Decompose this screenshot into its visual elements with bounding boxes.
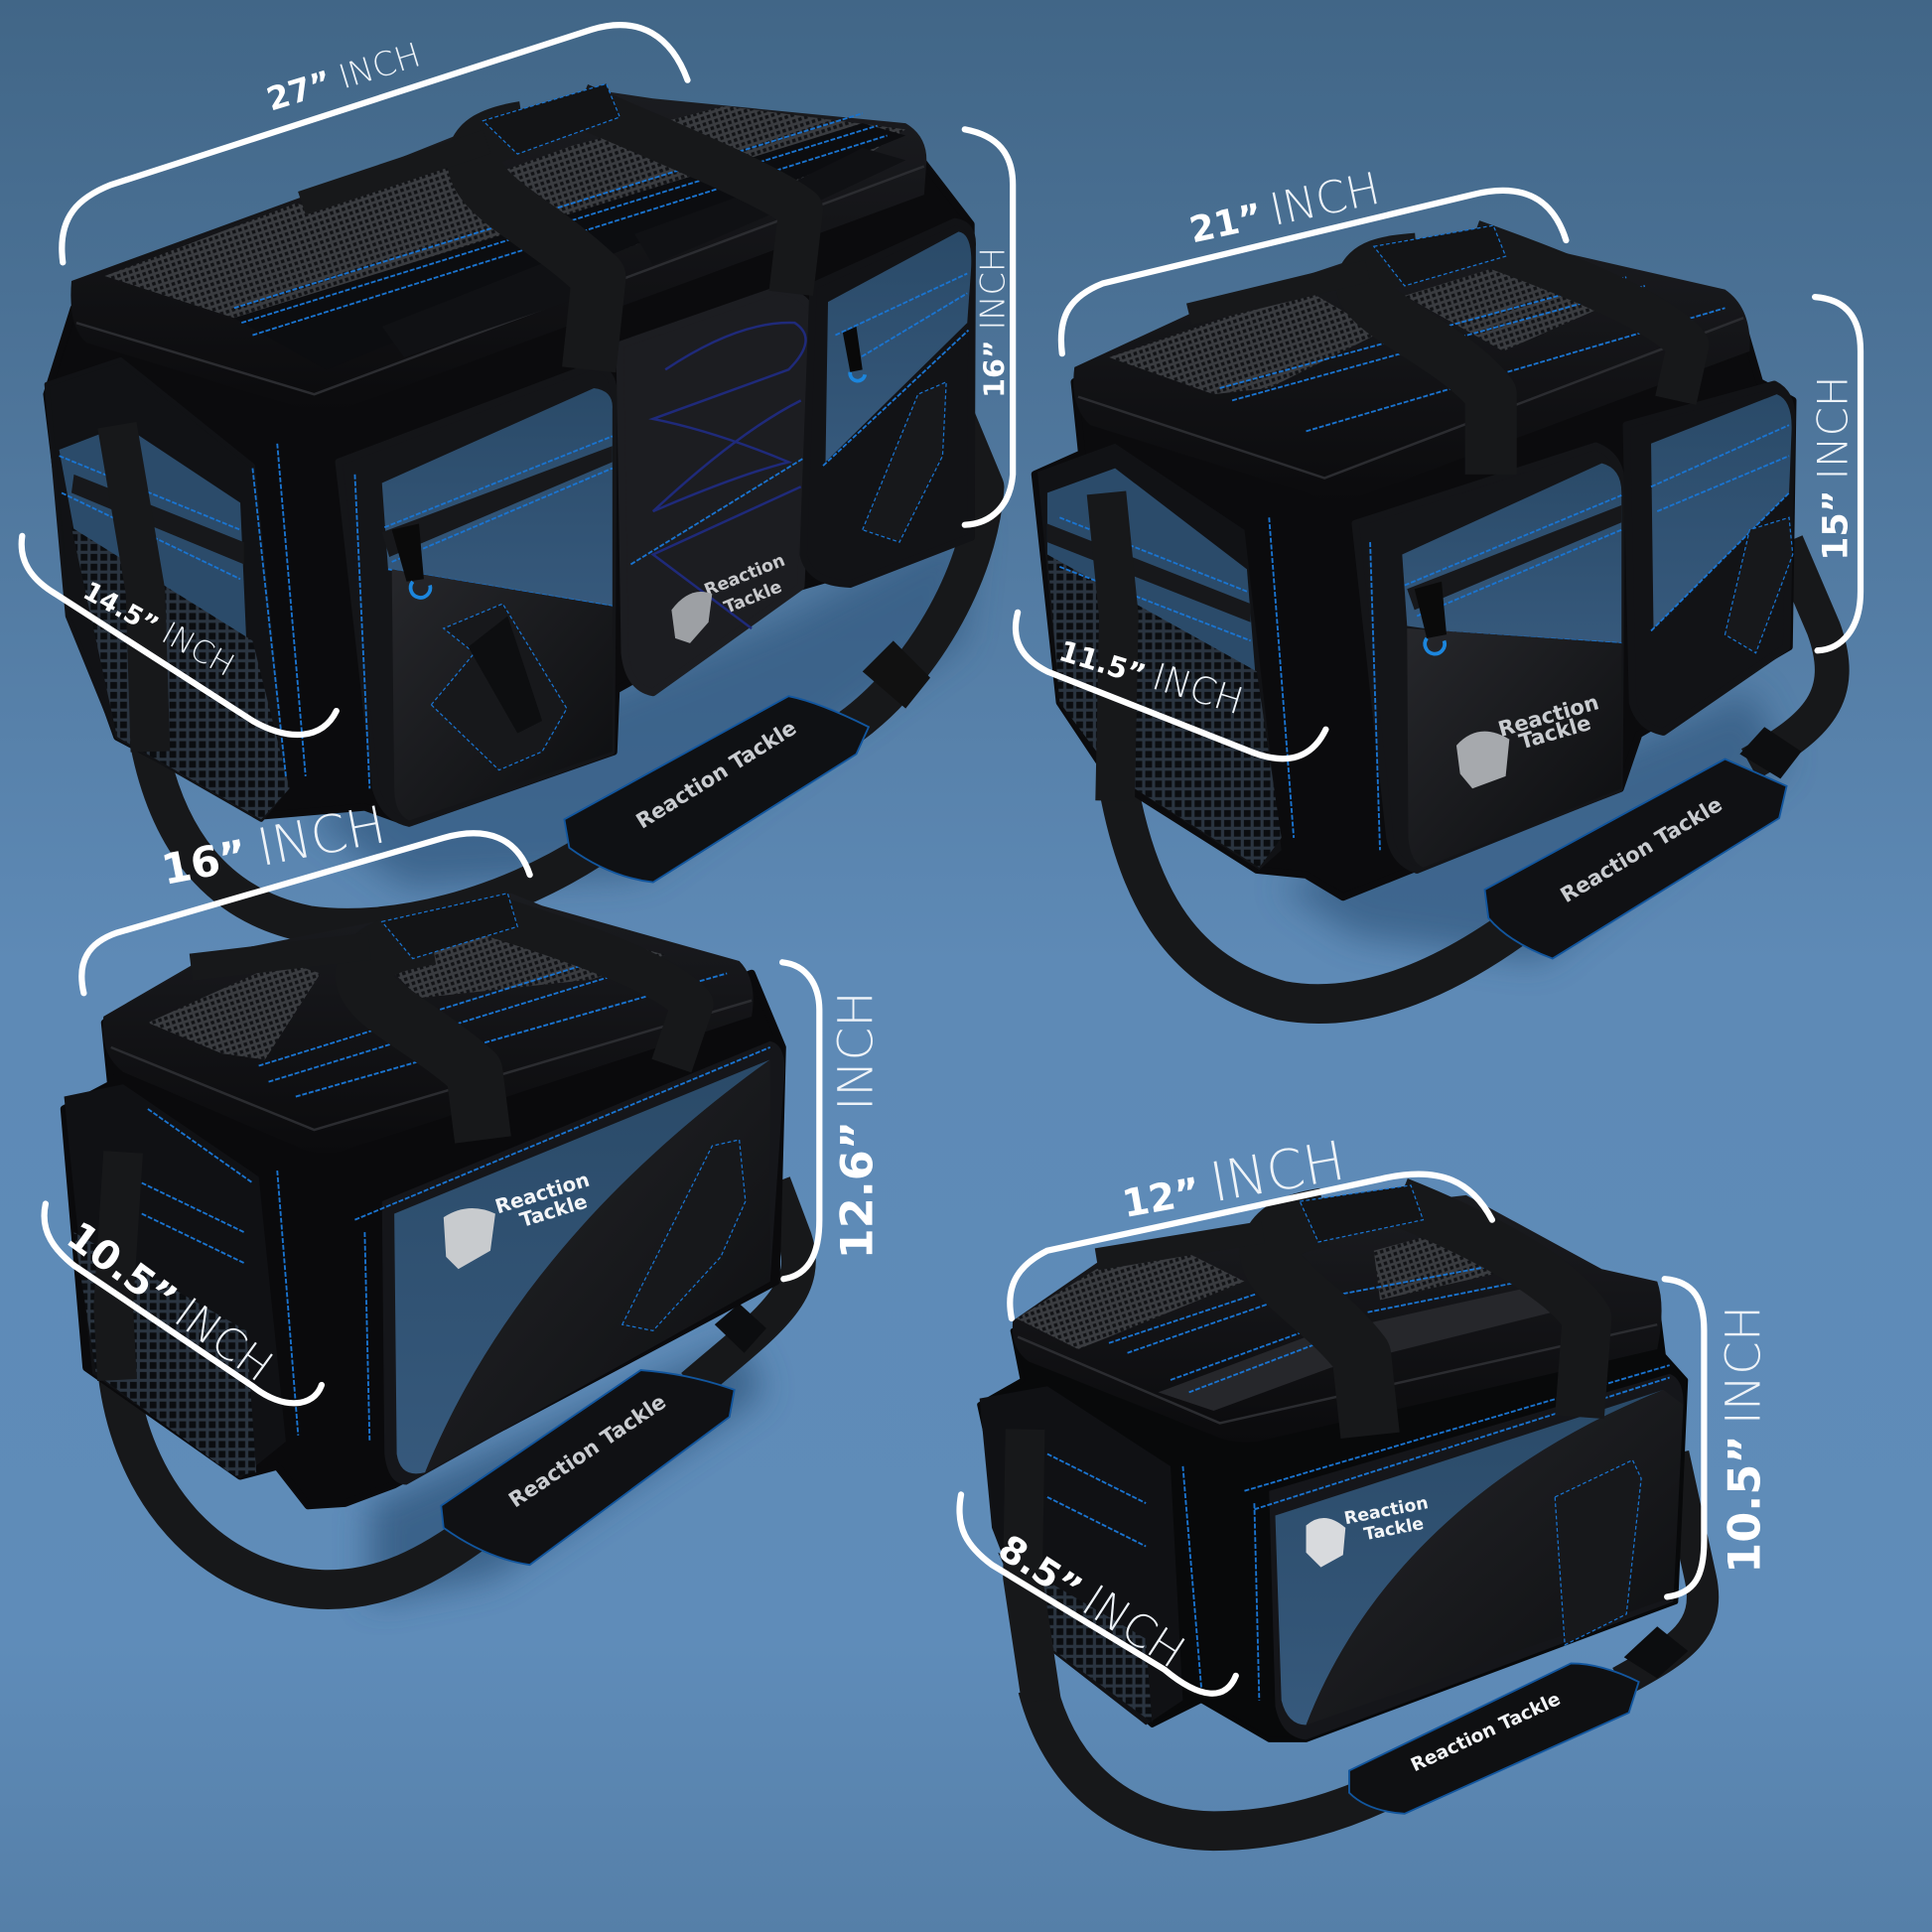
holster [622,1140,746,1330]
dimension: 8.5 inch, bag 4 width [959,1494,1236,1694]
front pocket: Reaction [1495,689,1601,742]
shoulder strap, rear part: Reaction Tackle [631,715,800,833]
front pocket [1355,446,1621,870]
dimension: 11.5 inch, bag 2 width [1016,613,1325,759]
bag body [47,160,971,823]
lid stitching and black stripes [234,123,905,369]
dimension: 10.5 inch, bag 4 height: 10.5”INCH [1716,1306,1771,1574]
end pocket [1037,444,1282,870]
bag 1: large tackle bag [47,83,986,927]
shoulder strap, rear part: Reaction Tackle [1556,791,1726,907]
front pocket center with cords: Tackle [722,577,785,619]
dimension: 12 inch, bag 4 length [1010,1128,1492,1318]
lid gloss [1159,1288,1553,1411]
shoulder strap, front part [113,1152,123,1380]
dimension: 12.6 inch, bag 3 height [782,962,885,1279]
front pocket right [803,221,972,584]
icon: fish logo [444,1208,495,1269]
right pocket [1626,384,1793,732]
dimension: 15 inch, bag 2 height [1808,297,1861,650]
bag 3: small long tackle bag [65,894,798,1601]
dimension: 16 inch, bag 1 height: 16”INCH [973,247,1012,398]
dimension: 12.6 inch, bag 3 height: 12.6”INCH [829,991,885,1259]
front panel: Reaction [1342,1493,1430,1529]
lid [70,91,926,413]
icon: fish logo [1456,732,1509,788]
top handle [1097,1185,1587,1436]
top handle [191,894,692,1140]
dimension: 16 inch, bag 1 height [965,129,1013,525]
shoulder strap, rear part [148,413,986,927]
dimension: 21 inch, bag 2 length [1061,163,1566,353]
end pocket [980,1386,1182,1725]
dimension: 15 inch, bag 2 height: 15”INCH [1808,375,1857,561]
front pocket center with cords: Reaction [702,551,788,601]
lid [102,894,754,1153]
dimension: 21 inch, bag 2 length: 21”INCH [1184,163,1384,253]
shadow [1282,690,1787,961]
lid mesh panels [104,106,905,351]
dimension: 8.5 inch, bag 4 width: 8.5”INCH [990,1521,1194,1679]
dimension: 16 inch, bag 3 length [81,795,530,993]
shoulder strap, rear part: Reaction Tackle [1408,1689,1564,1776]
front panel: Tackle [1362,1514,1426,1545]
bag body [980,1307,1686,1739]
dimension: 11.5 inch, bag 2 width: 11.5”INCH [1054,626,1248,723]
lid mesh [148,918,665,1059]
dimension: 10.5 inch, bag 3 width: 10.5”INCH [58,1210,281,1392]
holster [1555,1460,1641,1645]
dimension: 10.5 inch, bag 4 height [1665,1279,1771,1596]
bag body [65,973,782,1506]
shadow [369,1343,763,1601]
end pocket [65,1084,286,1478]
shoulder strap, rear part [117,1182,798,1589]
dimension: 27 inch, bag 1 length: 27”INCH [262,35,425,118]
shoulder strap, rear part [1037,1453,1703,1831]
icon: fish logo [671,592,712,643]
zipper pull [392,523,424,582]
lid mesh [1017,1232,1516,1349]
bag 4: small compact tackle bag [980,1185,1703,1831]
end pocket [47,359,286,819]
top handle wrap [302,83,801,369]
front pocket left [339,367,614,823]
front panel: Reaction [492,1169,593,1218]
dimension: 16 inch, bag 3 length: 16”INCH [156,795,390,897]
front panel [354,1041,784,1484]
front panel [1244,1365,1684,1739]
top handle [1189,225,1688,475]
front pocket center with cords [620,290,813,692]
bag 2: medium tackle bag [1035,225,1832,1004]
shadow [308,517,973,888]
icon: fish logo [1307,1518,1345,1568]
front pocket: Tackle [1516,710,1593,754]
front panel: Tackle [517,1190,590,1232]
lid [1013,1195,1662,1443]
holster [431,604,567,770]
dimension: 14.5 inch, bag 1 width: 14.5”INCH [77,572,240,684]
shoulder strap, rear part: Reaction Tackle [504,1389,670,1512]
shoulder strap, front part [1106,492,1119,801]
shoulder strap, rear part [1119,542,1832,1004]
shoulder strap, front part over end pocket [117,425,150,752]
bag body [1035,327,1793,897]
dimension: 27 inch, bag 1 length [62,25,688,262]
shoulder strap, front part [1023,1430,1041,1701]
lid mesh [1109,265,1614,394]
dimension: 12 inch, bag 4 length: 12”INCH [1116,1128,1349,1230]
lid [1073,225,1750,502]
dimension: 14.5 inch, bag 1 width [22,536,337,735]
